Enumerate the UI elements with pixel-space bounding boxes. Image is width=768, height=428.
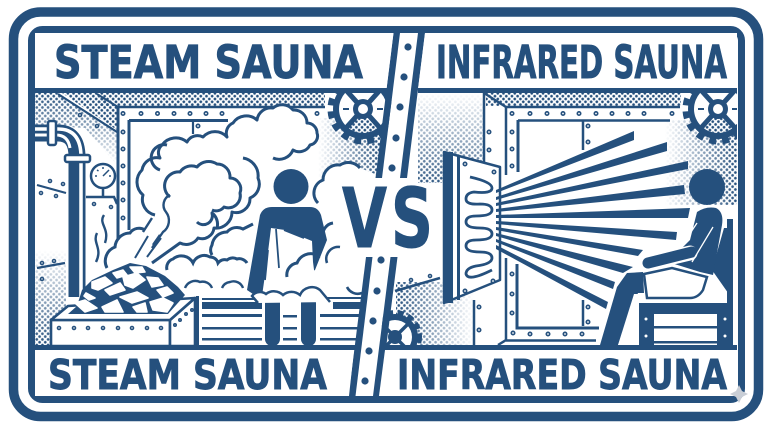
wall lines and door frame: [395, 93, 680, 345]
inner frame: [32, 30, 742, 400]
VS badge: S: [391, 172, 433, 267]
seated person on bench: [600, 169, 733, 345]
heater box: [51, 298, 195, 346]
rivets: door frame: [410, 112, 674, 336]
steam cloud: main: [137, 105, 318, 263]
icon: infrared heater panel: [443, 152, 500, 303]
leg: [600, 272, 644, 345]
icon: gear top right: [682, 93, 737, 144]
towel hem: [252, 287, 330, 303]
VS badge: V: [342, 172, 387, 267]
torso: [668, 208, 722, 275]
watermark sparkle: [730, 385, 748, 403]
forearm: [648, 253, 690, 263]
bench slats: [196, 296, 367, 346]
heating coil: [466, 177, 492, 277]
infrared rays: [496, 131, 690, 309]
steam cloud: lower puffs: [105, 224, 253, 288]
icon: gear bottom: [382, 310, 422, 345]
legs: [265, 296, 280, 346]
heading band: bottom left: STEAM SAUNA: [48, 351, 327, 399]
rock pile: [68, 263, 185, 314]
panel: infrared sauna scene: [371, 77, 750, 361]
icon: gear top: [328, 93, 392, 144]
wall lines and door frame: [37, 94, 325, 268]
halftone wall shading: [35, 93, 385, 345]
rivets: door frame: [40, 112, 319, 280]
panel: steam sauna scene: [35, 77, 395, 346]
icon: steam pipe: [35, 121, 90, 297]
icon: sauna rocks in heater box: [51, 263, 195, 346]
steam cloud: right: [287, 162, 362, 294]
icon: pressure gauge: [86, 164, 117, 204]
head: [274, 169, 308, 204]
bench and backrest: [639, 219, 733, 345]
divider strip: [348, 33, 425, 396]
VS badge: [342, 172, 433, 267]
lap towel: [644, 268, 707, 298]
halftone wall shading: [396, 93, 737, 345]
heading band: top left: STEAM SAUNA: [54, 36, 363, 89]
head: [689, 169, 725, 205]
rivets: box: [58, 309, 193, 330]
towel: [262, 228, 322, 298]
torso and arms: [247, 207, 327, 300]
person in towel: [247, 169, 330, 346]
steam wisps: [96, 215, 106, 262]
